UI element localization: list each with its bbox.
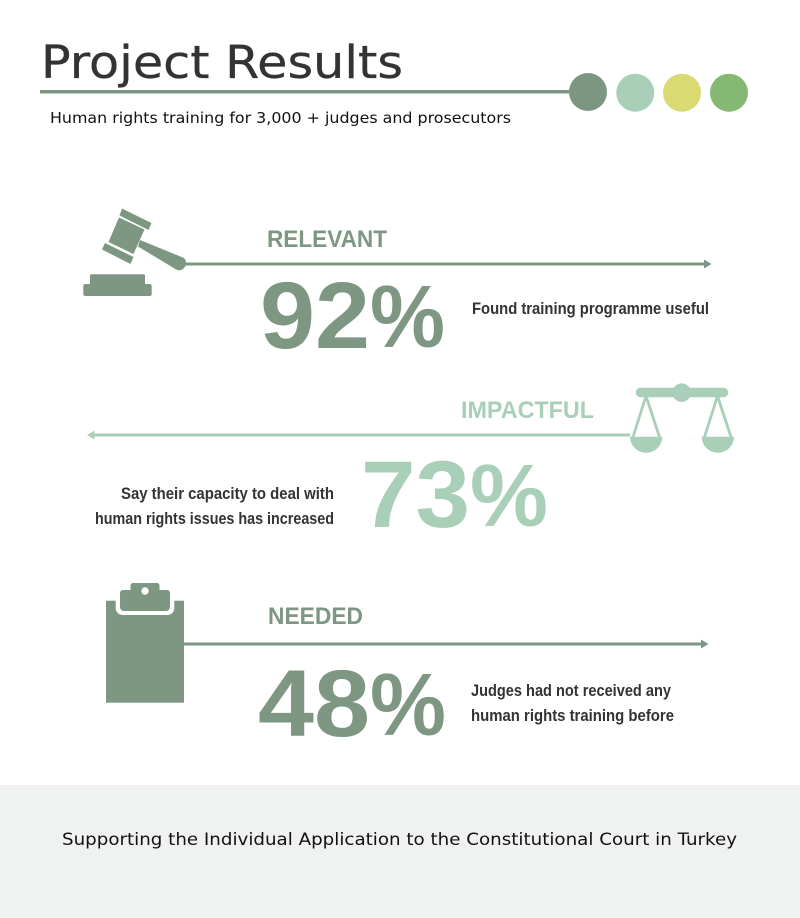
statistic: % [370,655,446,754]
palette dots [569,73,748,112]
icon: gavel [83,208,186,296]
footer text: Supporting the Individual Application to the Constitutional Court in Turkey [62,830,737,850]
statistic [361,442,548,548]
subtitle: Human rights training for 3,000 + judges and prosecutors [50,109,511,127]
label: IMPACTFUL [461,397,594,424]
statistic: 92 [260,263,370,369]
icon: clipboard [106,583,184,703]
statistic: % [470,446,548,545]
title: Project Results [41,36,403,89]
panel: needed [106,583,708,757]
footer band [0,785,800,918]
arrow [87,430,630,440]
description: Judges had not received any [471,682,672,700]
panel: impactful [87,383,734,548]
label: NEEDED [268,603,363,630]
description: Say their capacity to deal with [121,485,334,503]
panel: relevant [83,208,712,369]
statistic: 48 [258,651,370,757]
arrow [184,260,712,268]
description: Found training programme useful [472,300,709,318]
statistic [260,263,445,369]
icon: scales [630,383,734,453]
description [471,682,674,725]
description [95,485,334,528]
statistic: 73 [361,442,470,548]
statistic [258,651,446,757]
label: RELEVANT [267,226,387,253]
statistic: % [370,267,445,366]
arrow [184,640,708,648]
description: human rights issues has increased [95,510,334,528]
header rule [40,90,575,94]
description: human rights training before [471,707,674,725]
